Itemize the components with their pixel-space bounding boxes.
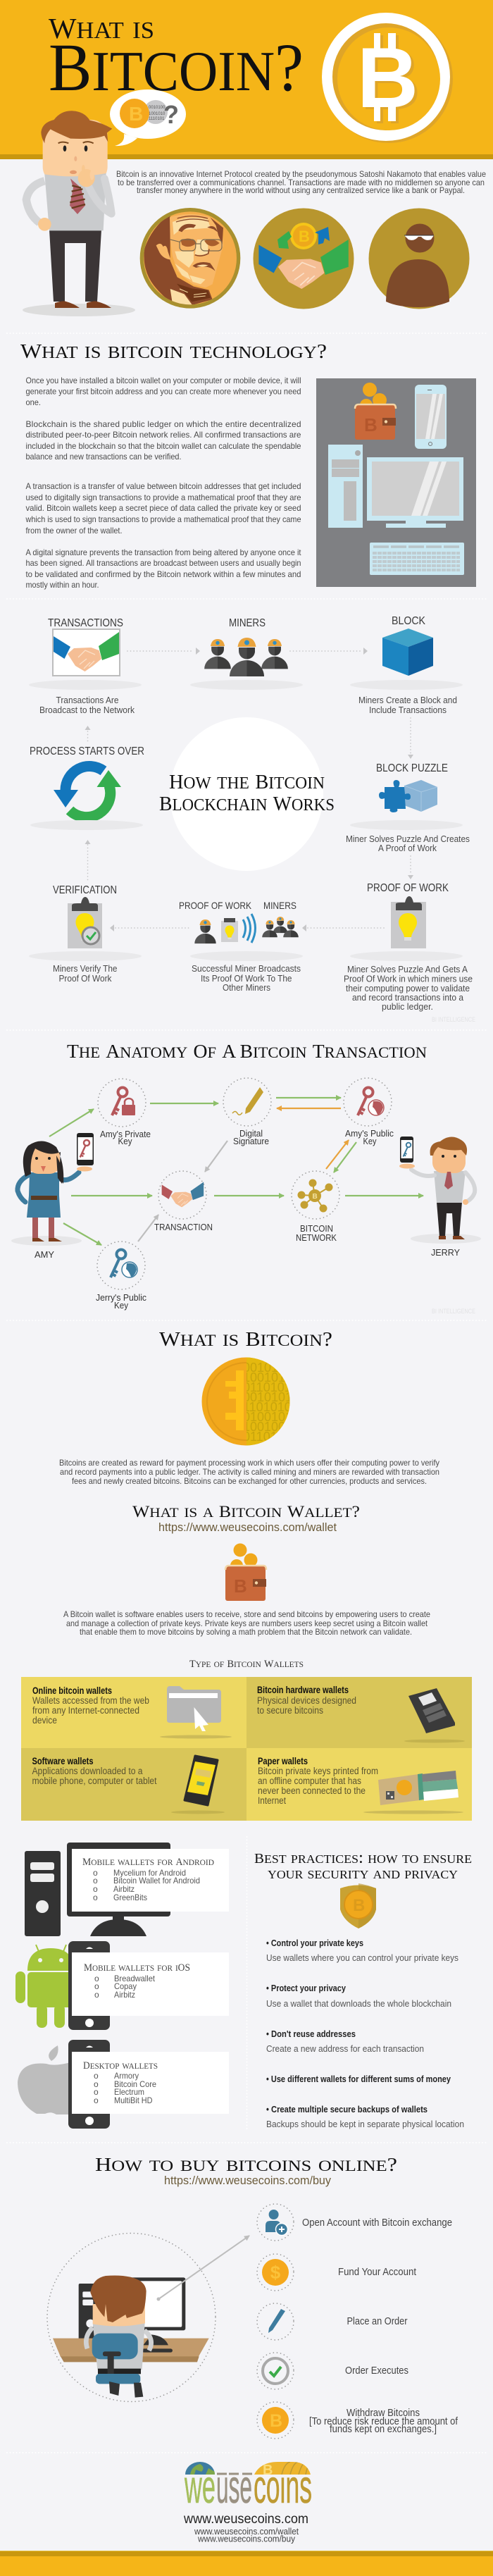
list: ios wallets: Copay [114,1981,137,1991]
heading: what is bitcoin: What is Bitcoin ? [159,1325,332,1351]
step: withdraw bitcoins [257,2402,458,2439]
heading: best practices: your security and privacy [268,1864,458,1883]
logo: weusecoins [185,2462,311,2503]
step: miners broadcast: Its Proof Of Work To The [201,973,292,984]
step: miners broadcast: MINERS [263,900,297,911]
node: Jerry's public key [96,1241,146,1311]
center circle title: Blockchain Works [159,789,335,816]
arrow: verification to process [85,840,90,881]
text block: best practices list: • Protect your privacy [266,1983,347,1993]
node: transaction handshake: TRANSACTION [154,1222,213,1232]
footer links: www.weusecoins.com/wallet [194,2526,299,2537]
text block: what is bitcoin: Bitcoins are created as reward for payment processing work in which users offer their computing power to verify [59,1458,439,1468]
text block: what is bitcoin: and record payments into a public ledger. The activity is called mining and miners are rewarded with transaction [60,1467,439,1477]
panel: devices illustration: B [364,414,377,435]
step: verification: Miners Verify The [53,963,117,974]
text block: technology explanation: A digital signature prevents the transaction from being altered by anyone once it [25,547,301,557]
icon: half digital coin: 0010101 [243,1390,292,1404]
credit: BI INTELLIGENCE [432,1016,475,1024]
icon: anonymous figure circle [369,209,469,309]
heading: what is a bitcoin wallet: What is a Bitcoin Wallet ? [132,1500,360,1521]
list: desktop wallets: MultiBit HD [114,2095,153,2105]
arrow: from screen to steps [156,2236,249,2301]
text block: what is bitcoin: fees and newly created bitcoins. Bitcoins can be exchanged for other currencies, products and services. [72,1476,427,1486]
icon: big bitcoin coin: B [357,30,418,125]
panel: paper wallets: Bitcoin private keys printed from [258,1766,378,1776]
dividers [7,333,486,2453]
heading: anatomy of a transaction: The Anatomy Of A Bitcoin Transaction [67,1037,427,1063]
center circle title [159,717,335,871]
step: fund account: Fund Your Account [338,2267,416,2278]
step: block puzzle: A Proof of Work [378,843,437,853]
link: wallet url: https://www.weusecoins.com/wallet [158,1521,337,1534]
step: transactions: TRANSACTIONS [48,617,123,629]
node: Jerry's public key: Key [114,1300,128,1311]
icon: wallet with coins [225,1543,266,1601]
speech bubble: B [129,103,143,125]
list: desktop wallets: o [94,2071,99,2081]
icon: shield coin: B [353,1896,365,1915]
step: transactions [29,617,142,715]
text block: technology explanation: to be validated and confirmed by the Bitcoin network within a few minutes and [25,569,301,579]
panel: online wallets: from any Internet-connected [32,1705,139,1716]
text block: technology explanation: included in the blockchain so that the bitcoin wallet can calculate the spendable [25,441,301,451]
panel: software wallets: mobile phone, computer or tablet [32,1776,157,1786]
step: fund account: $ [270,2262,281,2283]
steps: how to buy [257,2204,458,2439]
character: Jerry: JERRY [431,1247,460,1258]
illustration: person at computer [47,2234,216,2401]
node: Amy's private key: Key [118,1136,132,1146]
step: proof of work [344,882,473,1012]
node: bitcoin network [292,1171,339,1243]
step: proof of work: Proof Of Work in which miners use [344,974,473,984]
list: android wallets: Mycelium for Android [113,1868,186,1878]
list: android wallets: Bitcoin Wallet for Android [113,1876,200,1885]
arrow: puzzle to proof of work [408,856,413,879]
panel: online wallets [21,1677,246,1748]
icon: half digital coin: 1001001 [243,1420,292,1434]
logo: weusecoins: B [263,2463,273,2478]
arrow: miners to verification [110,924,191,931]
icon: half digital coin: 1101010 [243,1400,292,1414]
step: order executes: Order Executes [345,2365,408,2377]
arrow: miners to block [290,648,368,655]
list: android wallets: o [93,1876,98,1885]
step: process starts over: PROCESS STARTS OVER [30,745,144,757]
text block: technology explanation: Once you have installed a bitcoin wallet on your computer or mobile device, it will [25,376,301,385]
list: desktop wallets: o [94,2095,99,2105]
node: Amy's public key: Key [363,1136,377,1146]
credit: BI INTELLIGENCE [432,1308,475,1315]
list: desktop wallets [94,2071,156,2105]
step: open account [257,2204,452,2241]
link: buy url: https://www.weusecoins.com/buy [164,2174,332,2187]
title: What is [49,8,154,46]
step: withdraw bitcoins: Withdraw Bitcoins [347,2408,420,2419]
node: Amy's private key [98,1079,151,1146]
text block: best practices list: • Create multiple secure backups of wallets [266,2104,428,2114]
heading: best practices [254,1849,472,1883]
text block: technology explanation: A transaction is a transfer of value between bitcoin addresses that get included [25,481,301,491]
arrow: block to puzzle [408,718,413,759]
node: digital signature: Digital [239,1128,263,1139]
panel: software wallets: Applications downloaded to a [32,1766,143,1776]
icon: handshake exchange circle [254,209,354,309]
step: block [350,615,463,715]
step: proof of work: and record transactions into a [352,992,464,1003]
icon: big bitcoin coin [322,13,453,143]
text block: what is bitcoin [59,1458,439,1486]
node: bitcoin network: NETWORK [296,1232,337,1243]
step: proof of work: PROOF OF WORK [367,882,449,894]
step: block: Include Transactions [369,705,447,715]
icon: half digital coin [201,1357,292,1446]
step: order executes [257,2353,408,2389]
node: Amy's public key [344,1078,394,1146]
text block: technology explanation: mostly within an hour. [25,580,99,590]
node: transaction handshake [154,1171,213,1232]
step: miners broadcast [179,900,303,993]
text block: technology explanation: from the owner of the wallet. [25,526,123,535]
icon: half digital coin: 0110101 [243,1380,292,1394]
panel: desktop computer with android wallets card [25,1843,229,1936]
panel: hardware wallets: Bitcoin hardware wallets [257,1685,349,1695]
step: verification [29,884,142,984]
text block: best practices list: Use a wallet that downloads the whole blockchain [266,1998,451,2009]
character: Amy [11,1133,94,1260]
step: block puzzle [346,762,470,853]
node: bitcoin network: B [313,1193,318,1201]
panel: wallet types [21,1677,472,1821]
panel: paper wallets: Internet [258,1795,286,1806]
heading: what is bitcoin technology: What is bitcoin technology ? [20,337,327,364]
text block: technology explanation: one. [25,397,41,407]
icon: wallet with coins: B [234,1575,247,1597]
node: Jerry's public key: Jerry's Public [96,1292,146,1303]
list: ios wallets [94,1974,156,2000]
node: Amy's private key: Amy's Private [100,1129,151,1139]
step: transactions: Broadcast to the Network [39,705,135,715]
character: Amy: AMY [35,1249,54,1260]
text block: technology explanation: distributed peer-to-peer Bitcoin network relies. All confirmed transactions are [25,430,301,440]
text block: wallet description [63,1609,430,1637]
text block: best practices list: Create a new address for each transaction [266,2043,424,2054]
panel: android phone with ios wallets card [15,1941,229,2030]
step: place order: Place an Order [347,2316,408,2327]
step: transactions: Transactions Are [56,695,118,705]
icon: computer [25,1843,170,1936]
footer links: www.weusecoins.com [183,2512,308,2527]
speech bubble: 1001010 [149,112,166,116]
panel: online wallets: Wallets accessed from the web [32,1695,149,1706]
list: android wallets: Airbitz [113,1884,135,1894]
text block: technology explanation: balance and new transactions can be verified. [25,452,182,462]
icon: shield coin [340,1883,376,1928]
character: thinking man [23,111,135,316]
step: proof of work: public ledger. [382,1001,433,1012]
icon: android robot [15,1945,74,2028]
list: ios wallets: Breadwallet [114,1974,156,1983]
text block: wallet description: A Bitcoin wallet is software enables users to receive, store and send bitcoins by empowering users to create [63,1609,430,1619]
text block: technology explanation: Blockchain is the shared public ledger on which the entire decentralized [25,419,301,429]
step: open account: Open Account with Bitcoin exchange [302,2217,452,2229]
icon: half digital coin: 0100101 [243,1410,292,1424]
panel: online wallets: device [32,1715,57,1726]
panel: software wallets [21,1748,246,1821]
panel: online wallets: Online bitcoin wallets [32,1685,112,1696]
arrows [49,1098,423,1245]
icon: apple logo [18,2045,70,2114]
icon: handshake exchange circle: B [299,228,310,245]
step: miners broadcast: PROOF OF WORK [179,900,252,911]
panel: desktop computer with android wallets card: Mobile wallets for Android [82,1854,214,1868]
step: place order [257,2303,408,2340]
icon: phone [68,2040,110,2129]
footer band [0,2551,493,2576]
logo: weusecoins: use [216,2460,252,2513]
text block: wallet description: and manage a collection of private keys. Private keys are numbers users keep secret using a Bitcoin wallet [66,1618,428,1628]
footer links [183,2512,308,2544]
header band [0,0,493,159]
panel: devices illustration [316,378,476,587]
step: block: Miners Create a Block and [358,695,457,705]
chart: blockchain workflow [29,615,475,1024]
step: miners: MINERS [229,617,266,629]
arrow: process to transactions [85,726,90,743]
text block: technology explanation: valid. Bitcoin wallets keep a secret piece of data called the private key or seed [25,503,301,513]
panel: software wallets: Software wallets [32,1756,93,1766]
heading: how to buy bitcoins online: How to buy bitcoins online ? [95,2150,397,2176]
intro text [116,169,486,195]
list: desktop wallets: Bitcoin Core [114,2079,156,2089]
step: withdraw bitcoins: B [270,2411,282,2431]
text block: technology explanation [25,376,301,590]
list: ios wallets: o [94,1974,99,1983]
center circle title: How the Bitcoin [169,767,325,794]
text block: wallet description: that enable them to move bitcoins by solving a math problem that the Bitcoin network can validate. [80,1627,412,1637]
panel: apple phone with desktop wallets card [18,2040,229,2129]
text block: best practices list: • Control your private keys [266,1938,363,1948]
text block: technology explanation: has been signed. All transactions are broadcast between users and usually begin [25,558,301,568]
list: android wallets [93,1868,200,1902]
list: ios wallets: o [94,1990,99,2000]
list: ios wallets: Airbitz [114,1990,135,2000]
panel: hardware wallets [246,1677,472,1748]
text block: technology explanation: generate your first bitcoin address and you can create more whenever you need [25,386,301,396]
text block: best practices list: • Use different wallets for different sums of money [266,2074,451,2084]
step: withdraw bitcoins: funds kept on exchanges.] [330,2424,437,2435]
list: android wallets: o [93,1868,98,1878]
icon: half digital coin: 0010110 [243,1361,292,1375]
speech bubble: ? [163,100,179,129]
text block: best practices list [266,1938,464,2129]
step: withdraw bitcoins: [To reduce risk reduce the amount of [309,2416,458,2427]
heading: type of bitcoin wallets: Type of Bitcoin Wallets [189,1656,304,1670]
list: android wallets: o [93,1884,98,1894]
step: block puzzle: Miner Solves Puzzle And Creates [346,834,470,844]
step: fund account [257,2254,416,2291]
list: android wallets: GreenBits [113,1893,147,1902]
speech bubble: 0010100 [149,106,166,110]
text block: technology explanation: which is used to sign transactions to provide a mathematical proof that they came [25,514,301,524]
list: desktop wallets: o [94,2087,99,2097]
icon: Satoshi portrait circle [140,208,240,309]
logo: weusecoins: coins [254,2460,312,2513]
chart: transaction anatomy [11,1078,481,1315]
node: digital signature: Signature [233,1136,269,1146]
panel: paper wallets: never been connected to the [258,1785,366,1796]
text block: technology explanation: used to digitally sign transactions to provide a mathematical proof that they are [25,493,301,502]
step: miners broadcast: Other Miners [223,982,270,993]
text block: best practices list: • Don't reuse addresses [266,2029,356,2039]
intro text: transfer money anywhere in the world without using any centralized service like a bank or Paypal. [137,185,465,195]
icon: phone [68,1941,110,2030]
panel: hardware wallets: to secure bitcoins [257,1705,323,1716]
panel: hardware wallets: Physical devices designed [257,1695,356,1706]
list: ios wallets: o [94,1981,99,1991]
speech bubble: 1110101 [149,117,165,121]
step: process starts over [30,745,144,830]
panel: paper wallets: an offline computer that has [258,1776,361,1786]
node: digital signature [223,1078,271,1146]
logo: weusecoins: we [184,2460,216,2513]
panel: paper wallets: Paper wallets [258,1756,308,1766]
step: block puzzle: BLOCK PUZZLE [376,762,448,774]
node: Amy's public key: Amy's Public [345,1128,394,1139]
panel: android phone with ios wallets card: Mobile wallets for iOS [84,1960,190,1974]
footer links: www.weusecoins.com/buy [197,2534,295,2544]
icon: half digital coin: 0110110 [243,1430,290,1444]
step: miners [190,617,303,690]
panel: apple phone with desktop wallets card: Desktop wallets [83,2058,158,2072]
list: desktop wallets: o [94,2079,99,2089]
panel: paper wallets [246,1748,472,1821]
speech bubble [110,89,186,146]
list: desktop wallets: Armory [114,2071,139,2081]
text block: best practices list: Use wallets where you can control your private keys [266,1952,458,1963]
step: proof of work: Miner Solves Puzzle And Gets A [347,964,468,974]
step: proof of work: their computing power to validate [346,983,470,993]
text block: best practices list: Backups should be kept in separate physical location [266,2119,464,2129]
arrow: transactions to miners [127,648,200,655]
step: verification: Proof Of Work [59,973,112,984]
list: desktop wallets: Electrum [114,2087,144,2097]
step: verification: VERIFICATION [53,884,117,896]
icon: half digital coin: 1001010 [243,1370,292,1385]
heading: best practices: Best practices: how to ensure [254,1849,472,1867]
step: miners broadcast: Successful Miner Broadcasts [192,963,301,974]
title: Bitcoin? [49,18,304,108]
node: bitcoin network: BITCOIN [300,1223,333,1234]
character: Jerry [399,1137,481,1258]
step: block: BLOCK [392,615,425,627]
arrow: proof of work to miners [302,924,385,931]
list: android wallets: o [93,1893,98,1902]
